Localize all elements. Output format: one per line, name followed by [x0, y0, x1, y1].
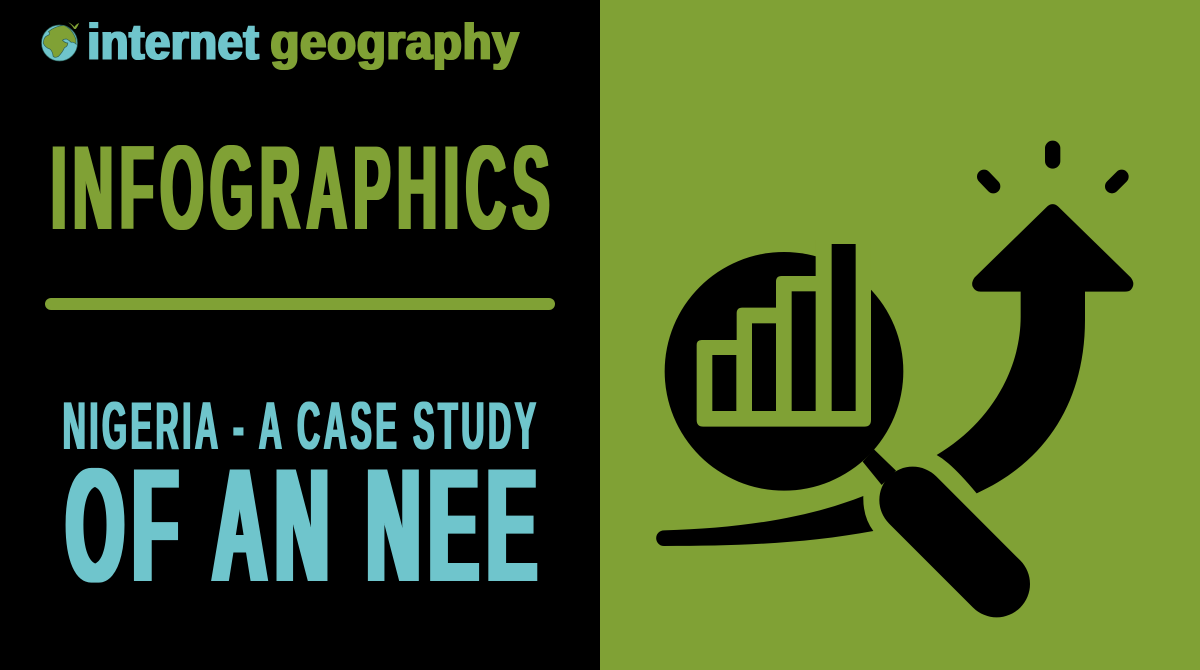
icon: spark ticks — [984, 148, 1122, 186]
panel: black left background — [0, 0, 600, 670]
logo text: internet: internet — [88, 14, 260, 70]
icon: upward arrow — [937, 204, 1133, 493]
icon: chart frame — [697, 240, 871, 427]
text: NIGERIA - A CASE STUDY — [63, 388, 540, 464]
icon: magnifier lens — [665, 252, 903, 491]
icon: magnifier with growth arrow — [656, 148, 1133, 584]
icon: magnifier neck — [863, 449, 896, 485]
icon: chart bars — [712, 244, 856, 411]
divider bar — [45, 298, 555, 310]
logo: internet geography — [41, 14, 519, 70]
text: OF AN NEE — [66, 435, 545, 616]
logo text: geography: geography — [270, 14, 520, 70]
panel: green right background — [600, 0, 1200, 670]
icon: lower curve of arrow — [656, 496, 873, 546]
text: INFOGRAPHICS — [51, 121, 556, 255]
icon: globe — [41, 22, 79, 61]
icon: magnifier handle — [913, 500, 997, 584]
